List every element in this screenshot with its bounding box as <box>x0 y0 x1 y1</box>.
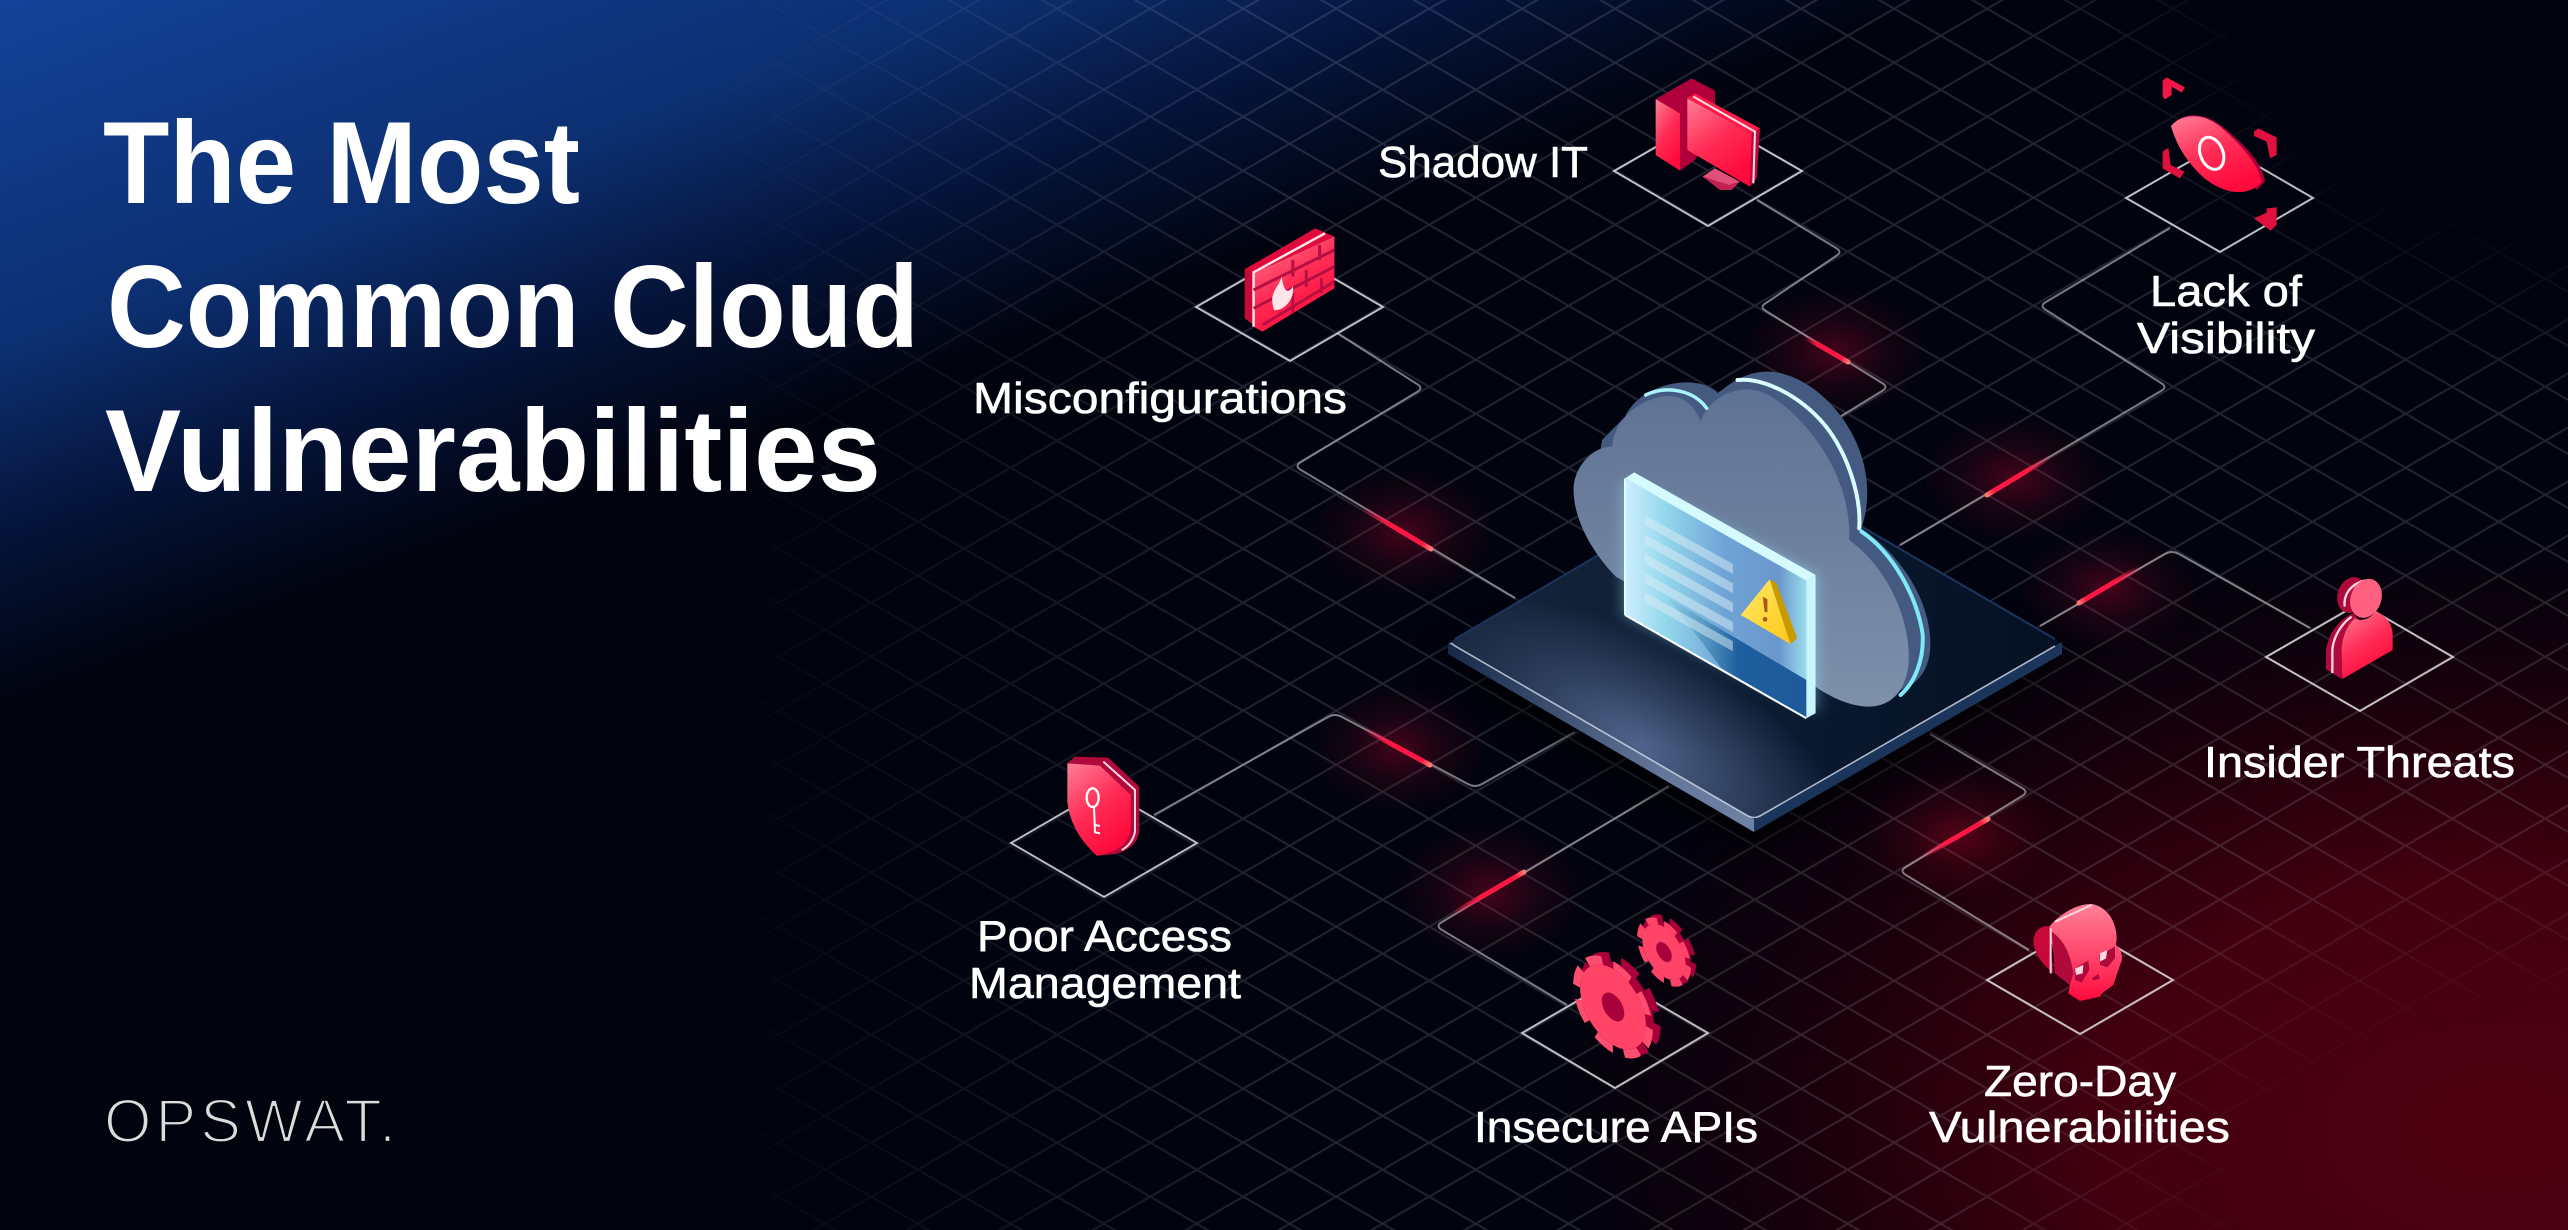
node: Lack of Visibility <box>2126 77 2313 252</box>
panel rims <box>1625 472 1816 718</box>
connector: Insecure APIs <box>1438 786 1669 1005</box>
connector: Lack of Visibility <box>1900 228 2170 545</box>
connector: Insider Threats <box>2040 552 2310 628</box>
label: Insider Threats: Insider Threats <box>2204 738 2515 787</box>
platform top surface <box>1451 464 2058 818</box>
base diamond <box>2266 603 2453 711</box>
label: Zero-Day Vulnerabilities <box>1929 1057 2230 1152</box>
glass document panel <box>1625 472 1816 718</box>
logo: OPSWAT: OPSWAT. <box>104 1087 396 1155</box>
cloud front face <box>1574 389 1909 707</box>
icon: eye with focus brackets <box>2163 77 2277 231</box>
icon: shield with key <box>1067 757 1139 856</box>
label: Insecure APIs: Insecure APIs <box>1474 1103 1758 1152</box>
cloud <box>1574 372 1930 707</box>
icon: gears <box>1577 904 1693 1074</box>
platform sides <box>1448 642 2062 832</box>
central platform <box>1440 464 2070 850</box>
label: Poor Access Management: Poor Access <box>977 912 1232 961</box>
connector: Poor Access Management <box>1154 715 1575 815</box>
base diamond <box>1522 979 1708 1088</box>
node: Insider Threats <box>2266 573 2453 711</box>
label: Lack of Visibility: Visibility <box>2137 314 2315 363</box>
base diamond <box>1196 253 1383 361</box>
warning triangle icon <box>1741 579 1797 644</box>
title: Common Cloud <box>107 241 919 372</box>
red glows behind connectors <box>1308 287 2198 962</box>
base diamond <box>1011 789 1197 897</box>
connector: Shadow IT <box>1757 200 1886 418</box>
label: Poor Access Management: Management <box>969 959 1241 1008</box>
base diamond <box>2126 144 2313 252</box>
label: Lack of Visibility: Lack of <box>2150 267 2303 316</box>
base diamond <box>1614 117 1802 226</box>
node: Insecure APIs <box>1522 904 1708 1088</box>
node: Shadow IT <box>1614 78 1802 226</box>
node: Zero-Day Vulnerabilities <box>1987 904 2173 1034</box>
node: Poor Access Management <box>1011 757 1197 897</box>
connector: Zero-Day Vulnerabilities <box>1902 734 2029 950</box>
label: Lack of Visibility <box>2137 267 2315 363</box>
label: Zero-Day Vulnerabilities: Zero-Day <box>1984 1057 2176 1106</box>
icon: firewall <box>1245 228 1334 332</box>
isometric grid <box>828 0 2568 1230</box>
label: Zero-Day Vulnerabilities: Vulnerabilities <box>1929 1103 2230 1152</box>
icon: person <box>2326 573 2393 679</box>
base diamond <box>1987 926 2173 1034</box>
icon: monitor <box>1656 78 1760 190</box>
title: Vulnerabilities <box>105 385 881 516</box>
connector: Misconfigurations <box>1298 333 1515 598</box>
node: Misconfigurations <box>1196 228 1383 361</box>
title <box>103 97 919 516</box>
panel face <box>1625 478 1806 718</box>
icon: skull <box>2033 904 2122 1001</box>
label: Shadow IT: Shadow IT <box>1378 138 1588 187</box>
cloud neon edges <box>1646 380 1923 695</box>
label: Misconfigurations: Misconfigurations <box>973 374 1347 423</box>
title: The Most <box>103 97 580 228</box>
document text lines <box>1645 515 1733 651</box>
cloud back layer <box>1593 372 1930 699</box>
label: Poor Access Management <box>969 912 1241 1008</box>
